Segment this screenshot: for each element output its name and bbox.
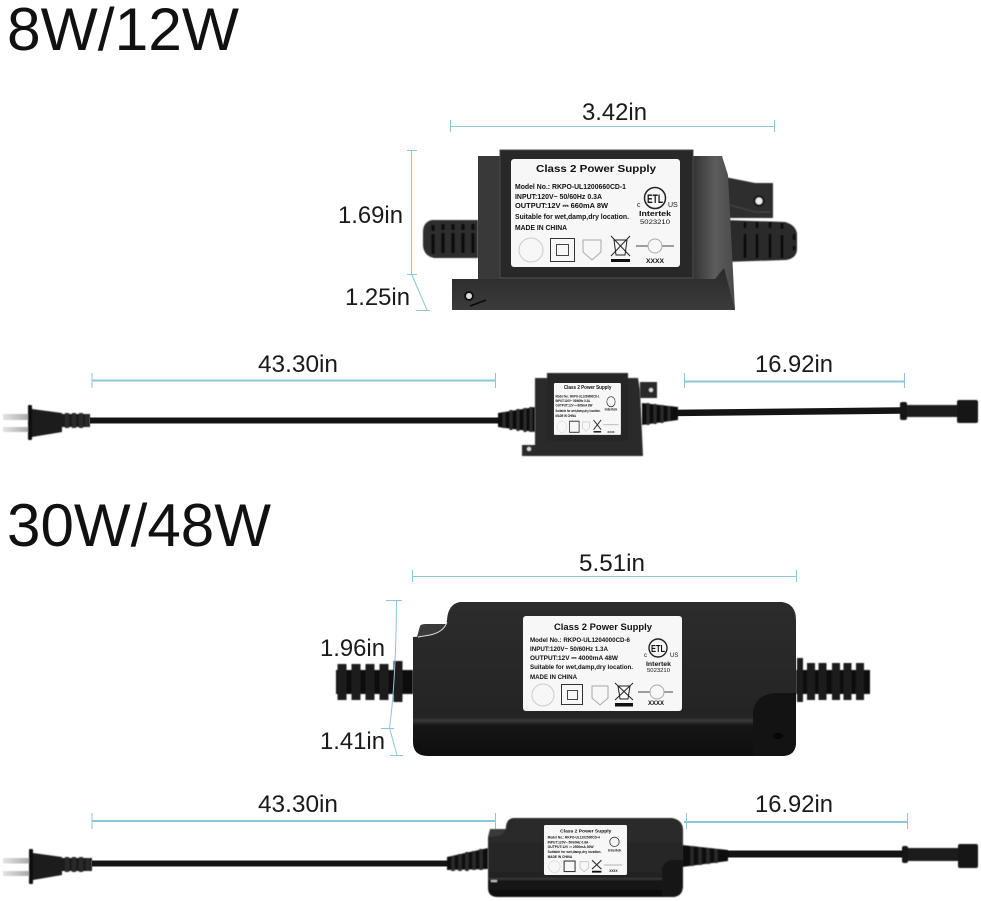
panel: 30W/48W close-up with dimensions: [320, 550, 870, 756]
product label: Class 2 Power Supply: [554, 622, 652, 632]
product label: [511, 159, 680, 267]
dimension: 16.92in cord: [684, 351, 905, 388]
product label: Model No.: RKPO-UL1200660CD-1: [556, 394, 600, 399]
dimension: width 3.42in: 3.42in: [582, 99, 647, 126]
dimension: height 1.69in: 1.69in: [338, 202, 403, 229]
product label: c: [644, 653, 647, 659]
dimension: 43.30in cord: 43.30in: [258, 351, 338, 378]
mounting tab: [640, 382, 657, 398]
product label: MADE IN CHINA: [530, 674, 577, 681]
power supply housing: [488, 818, 683, 897]
right strain relief: [682, 845, 728, 867]
dimension: width 5.51in: [412, 550, 797, 582]
connector: [902, 844, 978, 868]
heading: 30W/48W: 30W/48W: [7, 492, 271, 559]
product label: XXXX: [607, 430, 615, 434]
product label: c: [637, 202, 641, 209]
product label: [554, 383, 621, 435]
left strain relief: [423, 220, 478, 258]
power supply housing: [522, 373, 643, 456]
product label: OUTPUT:12V ⎓ 660mA 8W: [515, 203, 608, 210]
dimension: depth 1.25in: 1.25in: [345, 284, 410, 311]
dimension: height 1.69in: [338, 150, 417, 274]
product label: MADE IN CHINA: [548, 855, 573, 859]
product label: Class 2 Power Supply: [536, 163, 656, 175]
right strain relief: [642, 403, 678, 425]
dimension: height 1.96in: 1.96in: [320, 635, 385, 662]
left strain relief: [447, 848, 488, 871]
right strain relief: [725, 220, 797, 262]
right strain relief: [796, 658, 870, 702]
power supply housing: [413, 602, 796, 756]
product label: XXXX: [609, 869, 619, 873]
product label: OUTPUT:12V ⎓ 2500mA 30W: [548, 845, 594, 849]
dimension: width 3.42in: [450, 99, 775, 132]
left strain relief: [498, 407, 535, 432]
product label: INPUT:120V~ 50/60Hz 0.8A: [548, 840, 589, 844]
cord: unit to connector: [725, 850, 903, 858]
product label: US: [670, 653, 678, 659]
product label: ETL: [651, 644, 665, 655]
product label: Model No.: RKPO-UL1200660CD-1: [515, 184, 626, 191]
product label: Intertek: [646, 661, 671, 668]
cord: plug to unit: [92, 860, 450, 866]
product label: INPUT:120V~ 50/60Hz 0.3A: [515, 194, 602, 201]
product label: Model No.: RKPO-UL1204000CD-6: [530, 637, 630, 644]
plug: [3, 849, 92, 884]
product label: Suitable for wet,damp,dry location.: [515, 214, 629, 221]
dimension: width 5.51in: 5.51in: [579, 550, 645, 577]
product label: XXXX: [648, 701, 664, 707]
dimension: depth 1.25in: [345, 274, 430, 311]
product label: Intertek: [608, 848, 621, 852]
product label: Suitable for wet,damp,dry location.: [556, 409, 601, 413]
dimension: 16.92in cord: 16.92in: [755, 791, 833, 818]
dimension: 43.30in cord: 43.30in: [258, 791, 338, 818]
dimension: height 1.96in: [320, 600, 402, 728]
product label: 5023210: [640, 219, 670, 226]
dimension: 43.30in cord: [92, 351, 496, 388]
panel: 8W/12W close-up with dimensions: [338, 99, 797, 311]
product label: INPUT:120V~ 50/60Hz 1.3A: [530, 646, 608, 653]
product label: MADE IN CHINA: [515, 225, 567, 232]
product label: ETL: [647, 192, 663, 206]
dimension: 43.30in cord: [92, 791, 496, 829]
panel: 8W/12W full cord: [3, 351, 978, 456]
mounting tab right: [725, 177, 773, 218]
product label: Class 2 Power Supply: [564, 385, 612, 390]
product label: OUTPUT:12V ⎓ 660mA 8W: [556, 403, 592, 408]
product label: MADE IN CHINA: [556, 414, 577, 418]
product label: Suitable for wet,damp,dry location.: [548, 850, 601, 854]
power supply housing: [452, 150, 735, 310]
product label: OUTPUT:12V ⎓ 4000mA 48W: [530, 655, 619, 662]
cord: plug to unit: [90, 418, 500, 424]
cord: unit to connector: [670, 410, 903, 413]
product label: XXXX: [646, 258, 665, 265]
product label: US: [668, 202, 678, 209]
product label: Intertek: [605, 407, 617, 411]
product label: [544, 825, 627, 875]
product label: INPUT:120V~ 50/60Hz 0.3A: [556, 399, 591, 403]
dimension: 16.92in cord: 16.92in: [755, 351, 833, 378]
product label: Model No.: RKPO-UL1202500CD-4: [548, 836, 600, 840]
product label: 5023210: [647, 668, 670, 674]
plug: [3, 405, 90, 440]
product label: [523, 616, 682, 711]
product label: Suitable for wet,damp,dry location.: [530, 664, 633, 671]
connector: [900, 400, 978, 423]
dimension: 16.92in cord: [684, 791, 908, 829]
product label: Intertek: [639, 209, 672, 218]
dimension: depth 1.41in: 1.41in: [320, 728, 385, 755]
product label: Class 2 Power Supply: [560, 828, 612, 833]
left strain relief: [336, 661, 413, 702]
panel: 30W/48W full cord: [3, 791, 978, 897]
